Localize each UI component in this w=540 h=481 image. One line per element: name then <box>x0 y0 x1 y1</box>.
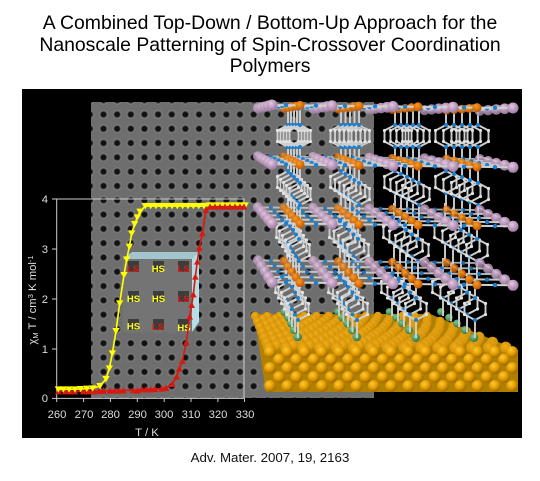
inset: spin-state block with HS / LS labels: HS <box>152 294 165 305</box>
inset: spin-state block with HS / LS labels: HS <box>127 294 140 305</box>
inset: spin-state block with HS / LS labels <box>123 252 199 334</box>
title: Polymers <box>230 55 310 77</box>
x axis numbers: 320 <box>209 409 227 421</box>
x axis numbers: 330 <box>236 409 254 421</box>
black image background <box>22 89 522 438</box>
y axis numbers: 0 <box>42 393 48 405</box>
ligand rings, third level <box>275 203 489 279</box>
x axis numbers: 290 <box>128 409 147 421</box>
green anchor atoms <box>280 308 478 342</box>
inset: spin-state block with HS / LS labels: LS <box>152 322 164 333</box>
panel: patterned film micrograph <box>91 102 374 398</box>
gold surface slab <box>251 312 518 392</box>
coordination plate 3 <box>253 202 518 232</box>
inset: spin-state block with HS / LS labels: HS <box>127 322 140 332</box>
ligand rings, top level <box>276 107 490 165</box>
hysteresis curves <box>58 205 245 391</box>
coordination plate 4 <box>253 255 518 291</box>
x axis numbers: 310 <box>182 409 200 421</box>
inset: spin-state block with HS / LS labels: LS <box>177 264 190 275</box>
chart: magnetic hysteresis <box>26 194 254 439</box>
x axis numbers: 270 <box>75 409 93 421</box>
y axis title: -1 <box>26 255 35 262</box>
y axis numbers: 4 <box>42 194 48 206</box>
y axis title: K mol <box>27 262 39 294</box>
coordination plate 1 <box>253 100 518 116</box>
coordination plate 2 <box>253 151 518 173</box>
y axis numbers: 1 <box>42 344 48 356</box>
pyridine-like ligand rings, lowest level <box>274 258 487 338</box>
x axis numbers: 280 <box>101 409 120 421</box>
title: Nanoscale Patterning of Spin-Crossover Coordination <box>39 34 501 56</box>
x axis numbers: 260 <box>48 409 66 421</box>
caption: citation: Adv. Mater. 2007, 19, 2163 <box>191 450 349 465</box>
inset: spin-state block with HS / LS labels: HS <box>177 323 191 334</box>
chart frame and ticks <box>52 199 244 402</box>
y axis title: T / cm <box>27 298 39 332</box>
y axis numbers <box>42 194 48 405</box>
x axis numbers: 300 <box>155 409 173 421</box>
y axis numbers: 3 <box>42 244 48 256</box>
y axis title: χ <box>27 339 39 345</box>
x axis title: T / K <box>135 427 159 439</box>
y axis title: 3 <box>26 294 35 298</box>
inset: spin-state block with HS / LS labels: LS <box>127 264 139 275</box>
inset: spin-state block with HS / LS labels: LS <box>177 294 190 305</box>
title: A Combined Top-Down / Bottom-Up Approach for the <box>43 12 497 34</box>
x axis numbers <box>48 409 254 421</box>
y axis title: M <box>31 332 40 339</box>
title <box>39 12 501 77</box>
ligand rings, second level <box>276 153 490 223</box>
inset: spin-state block with HS / LS labels: HS <box>152 264 165 275</box>
y axis numbers: 2 <box>42 294 48 306</box>
